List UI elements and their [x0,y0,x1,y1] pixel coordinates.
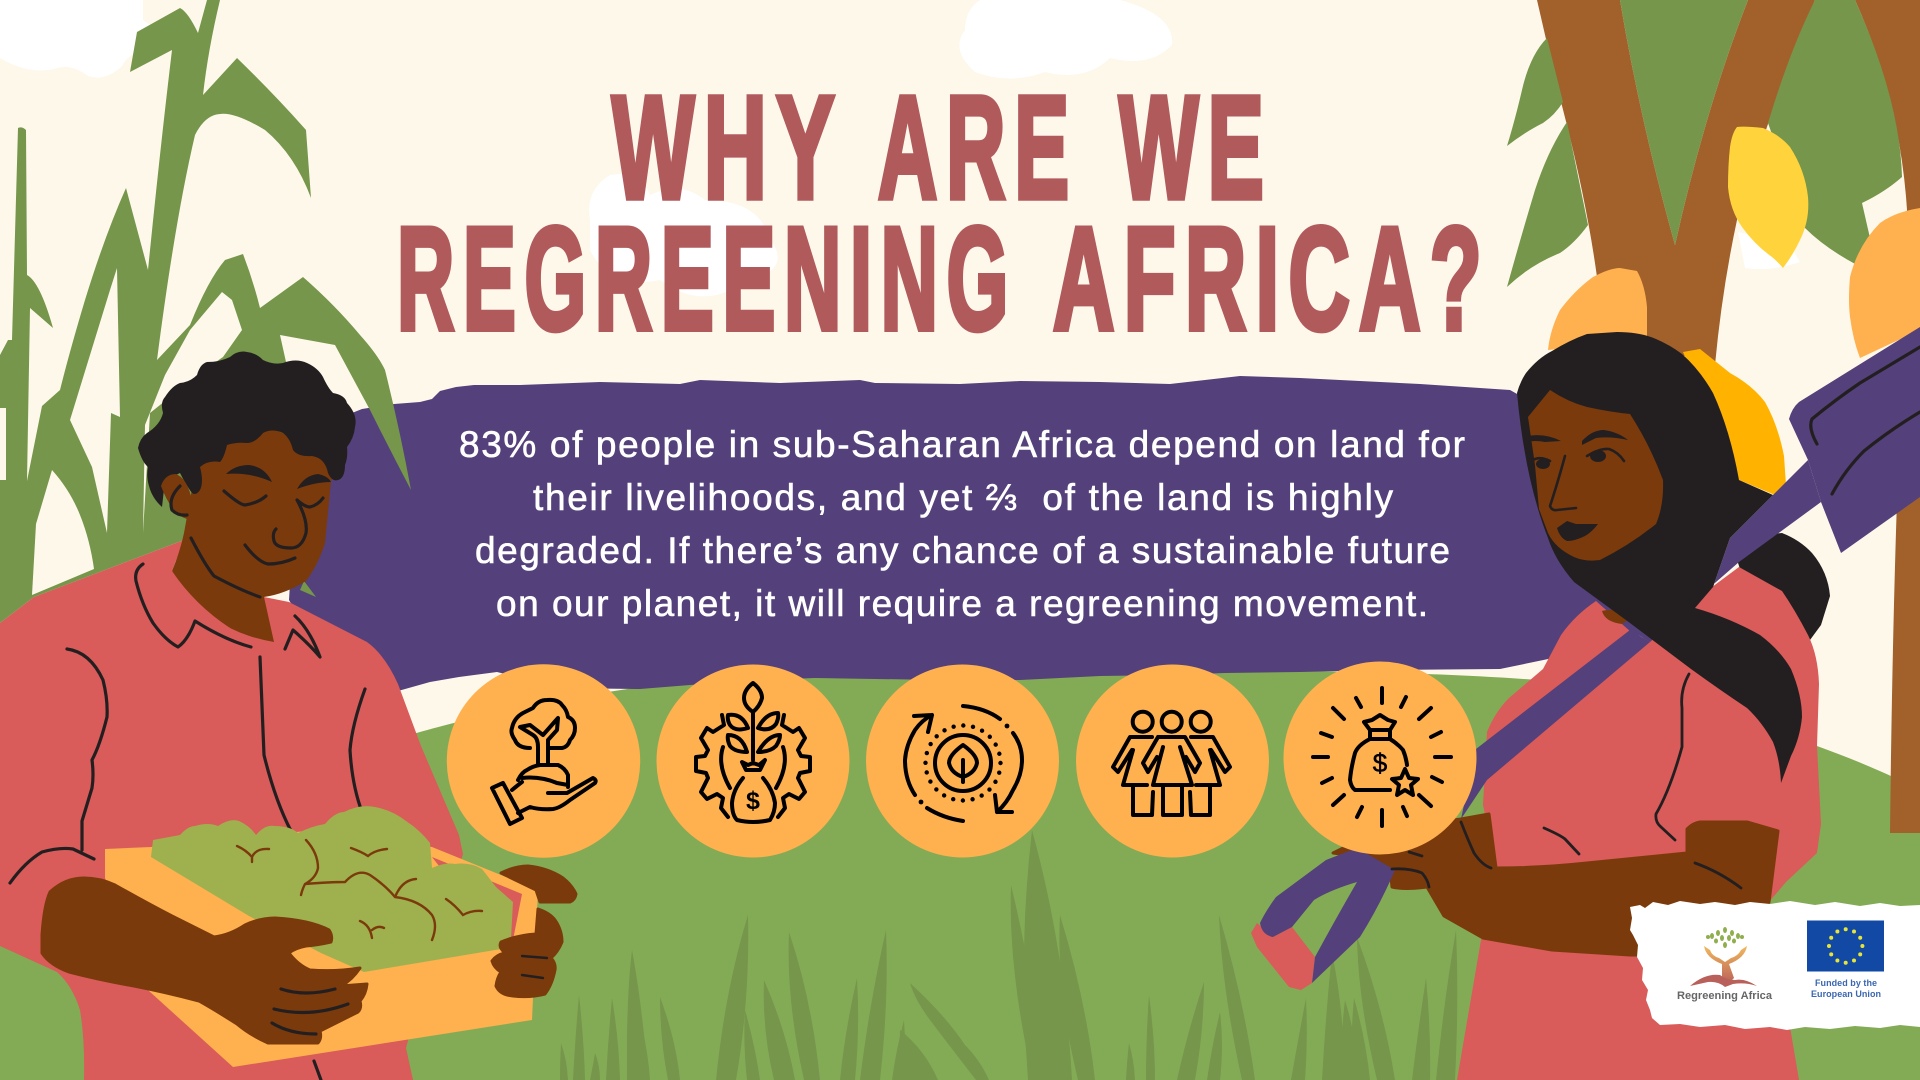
icon: money bag with star [1284,662,1476,854]
man [0,352,576,1080]
title: ARE [878,66,1078,229]
woman dress [1457,567,1821,1080]
logo: EU flag: European Union [1811,989,1881,999]
man hair [138,352,356,507]
man neck and face [172,425,340,642]
man facial features [171,465,331,597]
purple banner [289,376,1640,691]
title: AFRICA? [1053,197,1491,360]
shovel lines [1811,347,1920,494]
icon: three women [1076,664,1269,858]
tree leaves [1507,0,1902,287]
shovel [1461,327,1920,819]
icon: money bag with star: $ [1373,748,1388,778]
hair bun [1730,533,1830,640]
icon: recycling leaf [866,664,1059,858]
dollar sign: $ [746,787,760,815]
tree trunks [1537,0,1920,833]
shovel grip [1251,848,1395,990]
corn plant [0,0,411,623]
man shirt lines [10,564,365,1080]
body text [459,424,1465,624]
title [397,66,1491,360]
star [1392,769,1418,795]
scarf [1683,349,1786,495]
woman [1251,327,1920,1080]
woman face [1528,390,1663,561]
neck [1602,610,1640,624]
title: WHY [612,66,844,229]
logo patch [1630,901,1920,1030]
clouds [0,0,1800,296]
grass blades [560,830,1457,1080]
logo: Regreening Africa [1677,927,1773,1002]
body text: on our planet, it will require a regreening movement. [496,583,1428,624]
title: WE [1119,66,1273,229]
body text: 83% of people in sub-Saharan Africa depend on land for [459,424,1465,465]
title: REGREENING [397,197,1017,360]
seedlings in crate [151,806,513,972]
man shirt [0,540,463,1080]
man right hand [492,866,576,997]
logo: EU flag [1807,920,1884,999]
logo: Regreening Africa: Regreening Africa [1677,990,1773,1002]
body text: degraded. If there’s any chance of a sustainable future [475,530,1450,571]
crate [105,831,538,1067]
logo: EU flag: Funded by the [1815,978,1877,988]
woman arm and hand [1333,814,1778,955]
icon: gear with plant and money bag [656,664,850,858]
icon: hand holding sapling [447,664,640,858]
woman facial features [1528,430,1628,541]
icon circles row [447,662,1476,858]
woman hair [1517,332,1802,783]
tree fruits [1548,127,1920,358]
man ear [161,474,191,519]
crate inner rim [432,857,522,940]
ground [0,670,1920,1080]
man left arm and hand [42,878,367,1043]
woman arm and dress lines [1392,674,1741,888]
body text: their livelihoods, and yet ⅔ of the land is highly [533,477,1394,518]
